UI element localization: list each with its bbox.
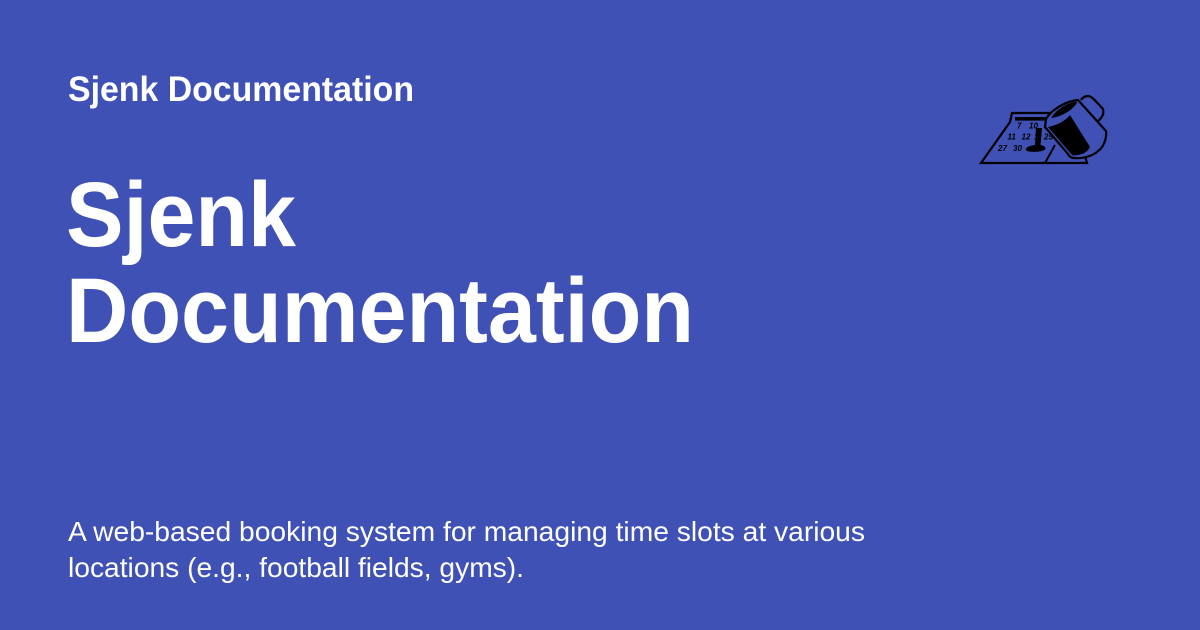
description text: locations (e.g., football fields, gyms). <box>68 552 524 583</box>
mug <box>1045 100 1106 158</box>
calendar sheet <box>981 113 1087 163</box>
site name heading: Sjenk Documentation <box>68 70 414 109</box>
calendar dates: 27 <box>997 144 1007 153</box>
page title: Sjenk <box>66 164 297 266</box>
description text: A web-based booking system for managing time slots at various <box>68 516 865 547</box>
calendar dates: 11 <box>1008 132 1016 142</box>
calendar dates <box>997 122 1053 153</box>
spilled coffee <box>1026 128 1045 152</box>
calendar dates: 25 <box>1043 132 1053 142</box>
page title <box>66 164 694 362</box>
page title: Documentation <box>66 260 694 362</box>
icon: calendar with tipping mug <box>981 96 1106 163</box>
description text <box>68 516 865 583</box>
calendar dates: 30 <box>1013 144 1022 153</box>
calendar dates: 7 <box>1017 122 1022 130</box>
calendar dates: 12 <box>1022 132 1031 142</box>
mug handle <box>1081 96 1103 121</box>
calendar dates: 10 <box>1029 122 1038 130</box>
calendar dates: 1 <box>1034 132 1039 142</box>
